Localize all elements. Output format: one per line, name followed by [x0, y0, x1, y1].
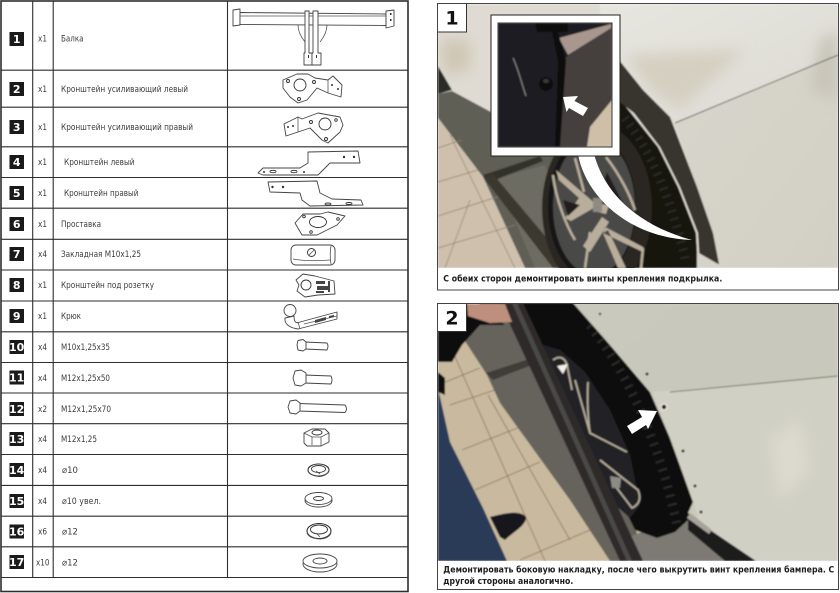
quantity: x1: [38, 311, 47, 322]
badge 8: 8: [13, 279, 21, 292]
badge 15: 15: [9, 495, 24, 508]
caption 1: [438, 268, 838, 290]
quantity: x1: [38, 280, 47, 291]
badge 3: [10, 120, 24, 134]
table grid: [1, 1, 408, 592]
name: ⌀10 увел.: [62, 496, 101, 507]
badge 10: 10: [9, 341, 25, 354]
floor tiles: [438, 350, 590, 561]
quantity: x1: [38, 122, 47, 133]
icon: spring washer: [307, 524, 331, 539]
name: Проставка: [61, 219, 101, 230]
badge 9: [10, 309, 24, 323]
car body: [572, 304, 838, 519]
quantity: x4: [38, 373, 47, 384]
icon: flat washer: [305, 492, 332, 507]
badge 5: [10, 186, 24, 200]
liner strip: [500, 303, 643, 561]
row 17: washer 12: [9, 554, 337, 572]
badge 4: [10, 155, 24, 169]
name: Балка: [61, 34, 84, 44]
badge 11: 11: [9, 372, 24, 385]
name: ⌀12: [62, 558, 78, 568]
panel: step 2: [438, 303, 838, 590]
quantity: x10: [36, 558, 50, 568]
tyre tread: [620, 101, 698, 268]
name: Кронштейн усиливающий правый: [61, 122, 193, 133]
badge 1: 1: [13, 33, 21, 46]
badge 2: 2: [13, 83, 21, 96]
photo: bumper screw: [438, 303, 838, 561]
lift arms: [483, 156, 543, 180]
row 1: beam: [10, 9, 394, 65]
quantity: x4: [38, 342, 47, 353]
badge 8: [10, 278, 24, 292]
badge 4: 4: [13, 156, 21, 169]
wheel well: [520, 303, 693, 538]
name: Кронштейн правый: [64, 188, 139, 199]
panel: step 1: [438, 4, 838, 292]
row 14: spring washer 10: [9, 463, 329, 477]
grey lift: [463, 303, 650, 561]
icon: bolt: [297, 340, 328, 351]
name: ⌀10: [62, 465, 78, 476]
caption 2: другой стороны аналогично.: [443, 577, 573, 587]
badge 1: [10, 32, 24, 46]
wheel arch: [612, 60, 719, 268]
grey lift: [438, 90, 555, 268]
badge 3: 3: [13, 121, 21, 134]
name: M12x1,25x50: [61, 373, 110, 384]
name: Закладная М10х1,25: [61, 249, 141, 260]
number box 2: 2: [445, 308, 459, 330]
quantity: x1: [38, 84, 47, 95]
row 13: nut: [9, 429, 329, 446]
badge 6: [10, 217, 24, 231]
arrow: [627, 410, 657, 434]
icon: spring washer: [308, 464, 329, 477]
quantity: x4: [38, 496, 47, 507]
caption 2: [438, 561, 838, 589]
name: M10x1,25x35: [61, 342, 110, 353]
rim: [543, 345, 640, 518]
panel: parts list table: [1, 1, 408, 592]
icon: hex nut: [304, 429, 329, 446]
quantity: x1: [38, 188, 47, 199]
sill: [688, 515, 756, 561]
number box 2: [438, 304, 466, 332]
quantity: x1: [38, 157, 47, 168]
icon: beam: [233, 9, 394, 65]
badge 16: 16: [9, 526, 25, 539]
rim: [542, 132, 652, 268]
name: Кронштейн усиливающий левый: [61, 84, 188, 95]
quantity: x4: [38, 249, 47, 260]
row 4: left bracket: [10, 151, 360, 175]
badge 7: 7: [13, 248, 21, 261]
icon: right bracket long: [268, 181, 363, 206]
row 6: spacer: [10, 212, 345, 235]
icon: embedded plate: [291, 245, 335, 265]
row 10: bolt M10x1,25x35: [9, 340, 328, 354]
number box 1: 1: [445, 8, 459, 30]
arrow in inset: [563, 96, 588, 116]
quantity: x2: [38, 404, 47, 415]
quantity: x4: [38, 465, 47, 476]
row 12: bolt M12x1,25x70: [9, 400, 346, 416]
inset photo: [491, 15, 620, 156]
row 15: enlarged washer 10: [9, 492, 332, 508]
row 2: left reinforcing bracket: [10, 74, 342, 103]
photo: wheel arch with inset: [438, 4, 838, 292]
icon: long bolt: [288, 400, 346, 414]
icon: right bracket: [284, 113, 343, 143]
person: [438, 304, 505, 362]
tiled floor: [438, 118, 525, 268]
icon: left bracket long: [258, 151, 360, 175]
row 11: bolt M12x1,25x50: [9, 370, 332, 386]
icon: bolt: [293, 370, 332, 386]
row 9: hook: [10, 304, 337, 329]
icon: left bracket: [283, 74, 342, 103]
quantity: x6: [38, 526, 47, 538]
quantity: x4: [38, 434, 47, 445]
icon: spacer: [295, 212, 345, 235]
row 7: embedded nut plate: [10, 245, 335, 265]
badge 2: [10, 82, 24, 96]
quantity: x1: [38, 34, 47, 44]
row 5: right bracket: [10, 181, 363, 206]
badge 12: 12: [9, 403, 24, 416]
badge 9: 9: [13, 310, 21, 323]
shoe: [490, 513, 526, 540]
badge 14: 14: [9, 464, 25, 477]
badge 6: 6: [13, 218, 21, 231]
badge 13: 13: [9, 433, 24, 446]
name: Крюк: [61, 311, 81, 322]
name: M12x1,25: [61, 434, 97, 445]
badge 17: 17: [9, 556, 24, 569]
name: Кронштейн левый: [64, 157, 135, 168]
white callout pointer: [578, 154, 692, 240]
row 8: socket bracket: [10, 274, 335, 297]
number box 1: [438, 4, 466, 32]
icon: socket bracket: [296, 274, 335, 297]
name: ⌀12: [62, 526, 78, 538]
row 3: right reinforcing bracket: [10, 113, 343, 143]
icon: tow hook: [284, 304, 337, 329]
under-car floor: [631, 520, 726, 561]
caption 1: С обеих сторон демонтировать винты крепления подкрылка.: [443, 274, 722, 284]
quantity: x1: [38, 219, 47, 230]
name: M12x1,25x70: [61, 404, 111, 415]
row 16: spring washer 12: [9, 524, 331, 539]
badge 5: 5: [13, 187, 21, 200]
door, top left: [438, 4, 500, 112]
icon: large flat washer: [303, 554, 337, 572]
badge 7: [10, 247, 24, 261]
name: Кронштейн под розетку: [61, 280, 154, 291]
